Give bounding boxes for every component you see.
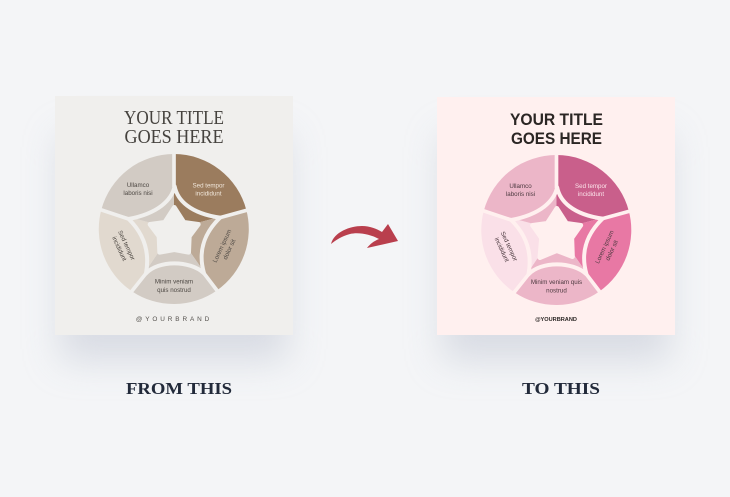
wheel labels: to: incididunt bbox=[578, 191, 604, 198]
wheel labels: to bbox=[491, 183, 623, 294]
wheel labels: from: incididunt bbox=[110, 236, 128, 262]
brand handle: to: @YOURBRAND bbox=[535, 317, 577, 323]
wheel labels: to: dolor sit bbox=[604, 239, 620, 262]
wheel labels: to: Ullamco bbox=[509, 183, 532, 190]
wheel labels: to: nostrud bbox=[546, 288, 567, 294]
panel: to card bbox=[437, 97, 675, 335]
card shadow: right bbox=[442, 135, 670, 361]
card shadow: left bbox=[60, 135, 288, 361]
title: to: YOUR TITLE bbox=[510, 110, 603, 129]
title: from: GOES HERE bbox=[124, 126, 224, 148]
title: from bbox=[124, 107, 224, 148]
wheel labels: to: Minim veniam quis bbox=[531, 279, 582, 286]
wheel labels: to: Sed tempor bbox=[575, 183, 607, 190]
wheel labels: from: Ullamco bbox=[127, 182, 150, 189]
wheel labels: to: laboris nisi bbox=[506, 191, 535, 198]
wheel labels: from: Lorem ipsum bbox=[212, 229, 233, 264]
wheel: to bbox=[481, 153, 632, 305]
arrow bbox=[331, 224, 398, 248]
wheel: from bbox=[99, 152, 250, 304]
wheel labels: from: incididunt bbox=[195, 190, 222, 198]
caption: from this: FROM THIS bbox=[126, 379, 232, 398]
wheel labels: to: Lorem ipsum bbox=[594, 230, 616, 265]
title: to: GOES HERE bbox=[511, 129, 602, 148]
brand handle: from: @YOURBRAND bbox=[136, 316, 212, 323]
wheel labels: from bbox=[109, 182, 240, 294]
title: to bbox=[510, 110, 603, 148]
wheel labels: to: incididunt bbox=[493, 237, 510, 263]
caption: to this: TO THIS bbox=[522, 379, 600, 398]
wheel labels: from: laboris nisi bbox=[123, 190, 153, 197]
wheel labels: from: Sed tempor bbox=[192, 182, 224, 190]
wheel labels: from: Sed tempor bbox=[116, 230, 136, 261]
wheel labels: to: Sed tempor bbox=[499, 231, 519, 262]
wheel labels: from: quis nostrud bbox=[157, 287, 191, 294]
panel: from card bbox=[55, 96, 293, 335]
wheel labels: from: dolor sit bbox=[222, 238, 238, 261]
wheel labels: from: Minim veniam bbox=[155, 278, 193, 286]
title: from: YOUR TITLE bbox=[124, 107, 224, 129]
